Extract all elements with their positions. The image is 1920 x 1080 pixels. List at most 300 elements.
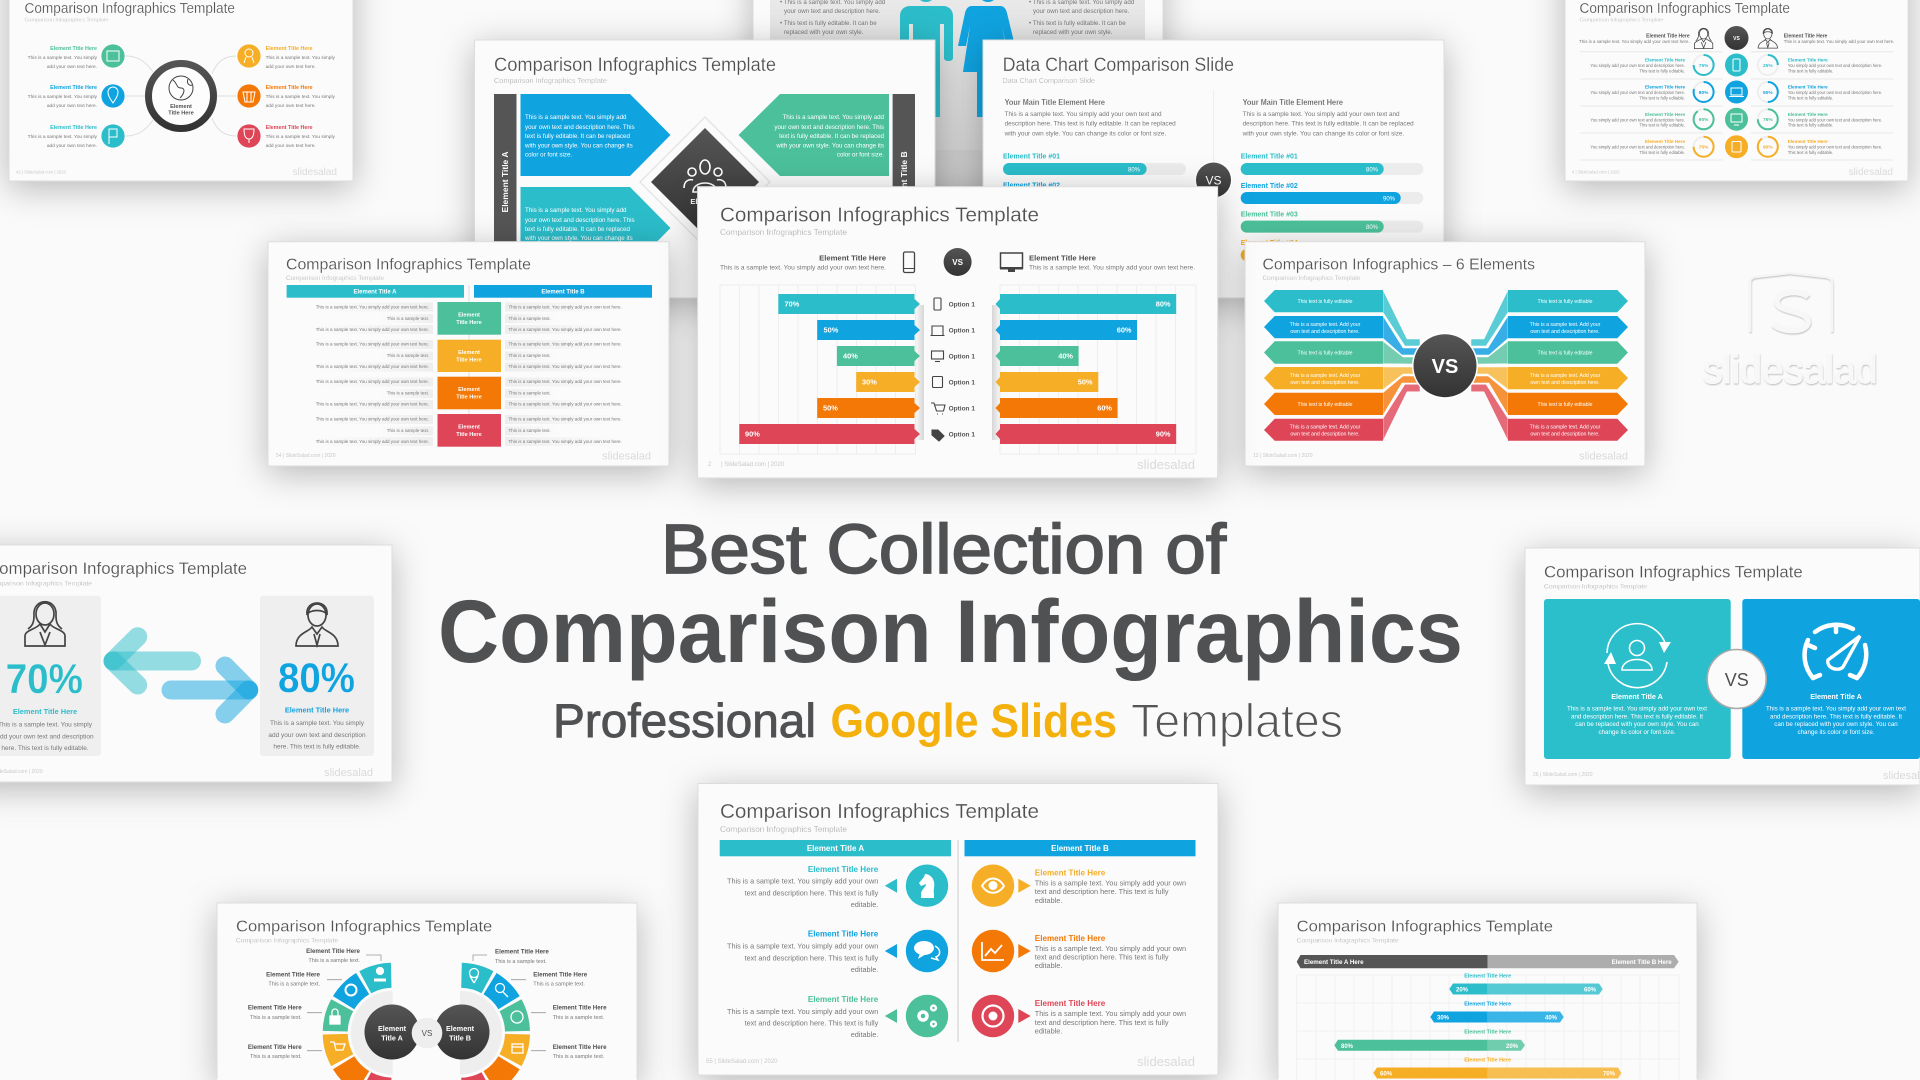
bullet text left: • This text is fully editable. It can be <box>780 20 877 27</box>
header row: This is a sample text. You simply add your own text here. <box>1784 39 1894 44</box>
element A hub <box>364 1004 420 1060</box>
element B hub: Element <box>446 1024 475 1033</box>
left labels: This is a sample text. You simply <box>28 94 98 100</box>
gauge percentages: 75% <box>1763 117 1773 123</box>
left labels: This is a sample text. <box>250 1054 302 1060</box>
right labels: add your own text here. <box>266 143 316 149</box>
header bar left <box>1297 955 1488 968</box>
right banners: This text is fully editable <box>1537 299 1593 305</box>
left row labels: Element Title Here <box>1645 112 1685 117</box>
left banners <box>1264 290 1383 441</box>
right labels: This is a sample text. You simply <box>266 134 336 140</box>
green pentagon: color or font size. <box>837 152 884 158</box>
VS badge: VS <box>1205 174 1222 188</box>
left row labels: This text is fully editable. <box>1639 123 1685 128</box>
left column text: Your Main Title Element Here <box>1005 98 1106 107</box>
header row <box>1579 26 1894 50</box>
right row labels <box>1788 58 1882 155</box>
watermark: slidesalad logo <box>1703 273 1878 392</box>
subheading: Comparison Infographics Template <box>720 825 848 834</box>
gauge percentages <box>1699 63 1773 150</box>
gauge percentages: 75% <box>1699 144 1709 150</box>
right banners: own text and description here. <box>1530 432 1600 438</box>
right banners: This text is fully editable <box>1537 402 1593 408</box>
right text rows: This is a sample text. You simply add your own text here. <box>508 327 622 332</box>
heading: Comparison Infographics Template <box>286 256 531 274</box>
right header text: Element Title Here <box>1029 254 1097 262</box>
row 3: Element Title Here <box>1464 1030 1511 1036</box>
center option icons <box>930 298 945 441</box>
heading: Comparison Infographics Template <box>236 919 492 936</box>
center element blocks: Title Here <box>456 394 482 400</box>
center option labels: Option 1 <box>949 406 975 412</box>
blue pentagon: This is a sample text. You simply add <box>525 114 627 121</box>
right row labels: Element Title Here <box>1788 84 1828 90</box>
right item 1 <box>972 864 1186 907</box>
right text rows: This is a sample text. <box>508 428 551 433</box>
right item 2: Element Title Here <box>1035 934 1106 943</box>
diamond with team icon: Element <box>690 197 720 206</box>
subheading: Data Chart Comparison Slide <box>1003 78 1095 85</box>
subheading: Comparison Infographics Template <box>720 228 848 237</box>
panel: blue element A: Element Title A <box>1810 692 1862 701</box>
heading: Comparison Infographics – 6 Elements <box>1262 256 1535 274</box>
left item 2: text and description here. This text is fully <box>745 954 879 962</box>
left item 1: editable. <box>851 900 878 909</box>
right row labels: You simply add your own text and description here. <box>1788 63 1882 68</box>
left text rows: This is a sample text. You simply add your own text here. <box>316 304 429 310</box>
center element blocks: Title Here <box>456 432 482 438</box>
subheading: Comparison Infographics Template <box>24 18 108 24</box>
left item 3: Element Title Here <box>808 995 879 1004</box>
brand: slidesalad <box>1137 457 1195 472</box>
column header A: Element Title A <box>807 844 864 853</box>
right item 3 <box>972 995 1186 1037</box>
left banners: own text and description here. <box>1290 432 1360 438</box>
heading: Comparison Infographics Template <box>24 0 235 17</box>
right labels: Element Title Here <box>266 46 313 52</box>
right text rows: This is a sample text. You simply add your own text here. <box>508 439 622 444</box>
column header B <box>964 840 1196 856</box>
left row labels: You simply add your own text and description here. <box>1590 90 1685 95</box>
left bars: 70% <box>784 300 800 308</box>
left text rows: This is a sample text. You simply add your own text here. <box>316 439 429 444</box>
left labels: Element Title Here <box>50 46 97 52</box>
left bar: Element Title A <box>500 152 510 212</box>
teal pentagon <box>520 187 670 269</box>
header row: VS <box>1733 36 1740 42</box>
subheading: professional google slides templates <box>553 694 1343 747</box>
row 1 <box>1449 973 1603 994</box>
element A hub: Element <box>378 1024 407 1033</box>
left item 1: Element Title Here <box>808 865 879 874</box>
left column text: description here. This text is fully editable. It can be replaced <box>1005 120 1176 128</box>
right item 2: editable. <box>1035 961 1062 970</box>
VS badge: VS <box>1725 670 1749 690</box>
heading: Comparison Infographics Template <box>720 205 1039 227</box>
right item 3: text and description here. This text is fully <box>1035 1018 1169 1027</box>
right labels: This is a sample text. <box>533 982 585 988</box>
right bars: 50% <box>1078 378 1093 386</box>
left header text <box>720 254 887 271</box>
left labels <box>248 948 361 1060</box>
right text rows: This is a sample text. <box>508 390 551 396</box>
left banners: This is a sample text. Add your <box>1290 322 1361 328</box>
right labels <box>266 46 336 149</box>
VS badge: VS <box>422 1029 432 1038</box>
brand: slidesalad <box>1137 1054 1195 1069</box>
panel: 70 percent: Element Title Here <box>13 707 77 716</box>
left banners: This is a sample text. Add your <box>1290 373 1361 379</box>
bullet text left: your own text and description here. <box>784 8 881 15</box>
slide: bottom right diverging bars <box>1278 903 1697 1080</box>
element B hub <box>434 1004 490 1060</box>
right row labels: Element Title Here <box>1788 112 1828 117</box>
teal pentagon: This is a sample text. You simply add <box>525 207 627 214</box>
right bar: Element Title B <box>899 151 909 213</box>
right row labels: You simply add your own text and description here. <box>1788 117 1882 122</box>
right header text <box>1029 254 1195 271</box>
right text rows: This is a sample text. You simply add your own text here. <box>508 402 622 406</box>
element B hub: Title B <box>449 1034 471 1042</box>
row 2: 30% <box>1437 1016 1450 1022</box>
right banners: This text is fully editable <box>1537 350 1593 356</box>
center option labels: Option 1 <box>949 432 975 438</box>
right banners: This is a sample text. Add your <box>1530 322 1601 328</box>
heading: Data Chart Comparison Slide <box>1003 55 1234 76</box>
column header A: Element Title A <box>353 290 397 296</box>
row 3: 80% <box>1341 1044 1354 1050</box>
right item 2: This is a sample text. You simply add your own <box>1035 944 1186 953</box>
row stripes <box>315 302 623 446</box>
left bar <box>494 94 516 298</box>
left bars: 90% <box>745 430 760 438</box>
center element blocks <box>438 302 501 447</box>
right bars: 60% <box>1097 404 1112 412</box>
slide: right two panels VS <box>1525 548 1920 785</box>
left text rows: This is a sample text. <box>387 316 429 321</box>
left column text <box>1004 98 1176 138</box>
left item 1: This is a sample text. You simply add your own <box>727 876 878 886</box>
right column text <box>1242 98 1414 138</box>
left text rows: This is a sample text. You simply add your own text here. <box>316 342 429 346</box>
left bar chart: 80% <box>1128 168 1141 174</box>
center option labels <box>949 302 975 438</box>
blue pentagon: with your own style. You can change its <box>524 142 633 150</box>
right bars: 80% <box>1156 300 1171 308</box>
right labels: This is a sample text. You simply <box>266 94 336 100</box>
panel: 80 percent: add your own text and description <box>268 732 366 739</box>
segment icons <box>330 968 523 1053</box>
left labels: Element Title Here <box>248 1005 302 1012</box>
row 3: 20% <box>1506 1044 1519 1050</box>
right bar chart <box>1241 154 1423 261</box>
panel: 80 percent: This is a sample text. You simply <box>270 720 365 727</box>
right bars: 60% <box>1117 326 1132 334</box>
brand: slidesalad <box>1849 167 1893 178</box>
panel: teal element A: change its color or font size. <box>1598 729 1676 736</box>
right connectors <box>1471 290 1508 441</box>
footer: 42 | SlideSalad.com | 2020 <box>16 170 67 174</box>
left item 2: This is a sample text. You simply add your own <box>727 942 878 950</box>
right labels: This is a sample text. <box>553 1015 605 1021</box>
center element blocks: Element <box>458 424 480 430</box>
panel: 80 percent: here. This text is fully editable. <box>273 744 361 750</box>
left labels: add your own text here. <box>47 64 97 70</box>
slide: left arrows percentage <box>0 545 392 782</box>
left column text: This is a sample text. You simply add your own text and <box>1005 111 1162 118</box>
left banners: This text is fully editable <box>1297 402 1353 408</box>
center element blocks: Title Here <box>456 358 482 364</box>
column header B <box>474 285 652 298</box>
left labels: This is a sample text. <box>308 958 360 964</box>
row 4: 60% <box>1380 1072 1393 1078</box>
VS badge <box>412 1018 442 1048</box>
gauge percentages: 50% <box>1763 90 1773 96</box>
column header B: Element Title B <box>1051 844 1109 853</box>
left text rows: This is a sample text. You simply add your own text here. <box>316 379 429 384</box>
right item 2 <box>972 930 1186 972</box>
watermark: slidesalad logo: slidesalad <box>1703 348 1878 392</box>
gauge percentages: 90% <box>1763 144 1773 150</box>
left bar chart <box>1003 154 1186 190</box>
right labels: This is a sample text. <box>553 1054 605 1060</box>
label connectors <box>307 955 546 1051</box>
left labels: Element Title Here <box>266 972 321 979</box>
center element blocks: Element <box>458 312 480 318</box>
footer: 4 | SlideSalad.com | 2020 <box>1572 170 1620 174</box>
brand: slidesalad <box>1579 450 1628 462</box>
left text rows: This is a sample text. You simply add your own text here. <box>316 364 429 369</box>
right text rows: This is a sample text. <box>508 316 551 321</box>
row 3 <box>1334 1030 1525 1051</box>
slide: top middle people comparison <box>753 0 1163 187</box>
heading: Comparison Infographics Template <box>1544 564 1803 582</box>
right segmented ring <box>461 963 530 1080</box>
brand: slidesalad <box>602 450 651 462</box>
VS badge <box>1412 333 1478 399</box>
left banners: own text and description here. <box>1290 380 1360 386</box>
left text rows <box>316 304 429 444</box>
left banners: This text is fully editable <box>1297 299 1353 305</box>
footer: 26 | SlideSalad.com | 2020 <box>1533 772 1593 778</box>
right column text: This is a sample text. You simply add your own text and <box>1243 111 1400 118</box>
right column text: Your Main Title Element Here <box>1243 98 1344 107</box>
right row labels: You simply add your own text and description here. <box>1788 90 1882 95</box>
row 4: Element Title Here <box>1464 1058 1511 1064</box>
left row labels: Element Title Here <box>1645 58 1685 62</box>
panel: 80 percent: Element Title Here <box>285 706 349 714</box>
right bar chart: Element Title #02 <box>1241 183 1298 190</box>
right labels: add your own text here. <box>266 64 316 70</box>
icon: male figure <box>900 0 953 117</box>
left bars: 30% <box>862 378 877 386</box>
right text rows: This is a sample text. You simply add your own text here. <box>508 304 622 310</box>
left item 1: text and description here. This text is fully <box>745 888 879 898</box>
hub ring with globe <box>148 64 214 128</box>
right labels: Element Title Here <box>495 949 549 956</box>
hub ring with globe: Title Here <box>168 110 194 116</box>
column header B: Element Title B <box>541 290 585 296</box>
left header text: Element Title Here <box>819 254 887 262</box>
left text rows: This is a sample text. <box>387 390 429 396</box>
right banners: own text and description here. <box>1530 329 1600 335</box>
right labels: Element Title Here <box>266 125 313 131</box>
green pentagon: This is a sample text. You simply add <box>783 114 885 121</box>
panel: teal element A: can be replaced with your own style. You can <box>1575 721 1699 728</box>
gauge percentages: 25% <box>1763 63 1773 69</box>
column header A <box>287 285 464 298</box>
left row labels: Element Title Here <box>1645 139 1685 144</box>
left item 2 <box>727 930 948 974</box>
subheading: professional google slides templates: Templates <box>1131 694 1343 747</box>
left banners: This is a sample text. Add your <box>1290 424 1361 430</box>
row 1: 60% <box>1584 988 1597 994</box>
left text rows: This is a sample text. You simply add your own text here. <box>316 402 429 406</box>
slide: central horizontal bar comparison: | SlideSalad.com | 2020 <box>721 462 785 468</box>
left banners: This text is fully editable <box>1297 350 1353 356</box>
heading: best collection of: Best Collection of <box>661 510 1227 588</box>
left labels: This is a sample text. <box>268 982 320 988</box>
header row: This is a sample text. You simply add your own text here. <box>1579 39 1690 44</box>
icon: female figure <box>958 0 1015 117</box>
center icon circles <box>1725 54 1748 158</box>
left item 2: editable. <box>851 965 878 974</box>
center option labels: Option 1 <box>949 380 975 386</box>
slide: top left central hub <box>9 0 353 181</box>
right labels: Element Title Here <box>553 1044 607 1051</box>
right labels <box>495 949 607 1060</box>
panel: blue element A: and description here. This text is fully editable. It <box>1770 713 1902 720</box>
green pentagon <box>738 94 889 176</box>
center element blocks: Element <box>458 387 480 393</box>
center option labels: Option 1 <box>949 328 975 334</box>
header bar right <box>1488 955 1679 968</box>
right row labels: This text is fully editable. <box>1788 150 1833 155</box>
icon: phone <box>904 252 914 272</box>
left row labels: This text is fully editable. <box>1639 68 1685 73</box>
left item 3 <box>727 995 948 1039</box>
panel: blue element A: This is a sample text. You simply add your own text <box>1766 706 1906 712</box>
right text rows: This is a sample text. You simply add your own text here. <box>508 379 622 384</box>
subheading: Comparison Infographics Template <box>1262 276 1361 282</box>
left icons <box>101 44 125 148</box>
right item 3: Element Title Here <box>1035 999 1106 1008</box>
row 2 <box>1430 1001 1564 1022</box>
left connectors <box>1383 290 1420 441</box>
right row labels: This text is fully editable. <box>1788 123 1833 128</box>
center option labels: Option 1 <box>949 354 975 360</box>
right labels: Element Title Here <box>533 972 588 979</box>
right bar chart: 80% <box>1366 168 1379 174</box>
connectors <box>126 56 236 136</box>
panel: blue element A: can be replaced with your own style. You can <box>1774 721 1898 728</box>
slide: table comparison <box>268 242 669 466</box>
right bars <box>996 294 1176 444</box>
left labels: This is a sample text. <box>250 1015 302 1021</box>
left header text: This is a sample text. You simply add your own text here. <box>720 264 886 271</box>
VS badge: VS <box>952 258 964 267</box>
heading: Comparison Infographics Template <box>494 55 776 76</box>
right row labels: This text is fully editable. <box>1788 95 1833 100</box>
left labels <box>28 46 98 149</box>
bullet text left: replaced with your own style. <box>784 29 864 36</box>
hub ring with globe: Element <box>170 104 192 110</box>
right text rows: This is a sample text. You simply add your own text here. <box>508 364 622 369</box>
row 4 <box>1373 1058 1621 1078</box>
slide: blue and green arrows around diamond <box>474 40 935 298</box>
arrow: left pointing teal <box>113 637 192 685</box>
element A hub: Title A <box>381 1034 403 1042</box>
blue pentagon <box>520 94 670 176</box>
right text rows: This is a sample text. You simply add your own text here. <box>508 416 622 422</box>
left segmented ring <box>323 963 392 1080</box>
left bars: 50% <box>824 326 839 334</box>
row 4: 70% <box>1603 1072 1616 1078</box>
slide: central horizontal bar comparison <box>698 187 1218 478</box>
left row labels: You simply add your own text and description here. <box>1590 117 1685 122</box>
panel: 80 percent <box>260 596 374 756</box>
left banners: own text and description here. <box>1290 329 1360 335</box>
slide: bottom center icon list <box>698 784 1218 1075</box>
header row: Element Title Here <box>1646 34 1690 40</box>
right bar chart: 80% <box>1366 225 1379 231</box>
panel: blue element A <box>1742 599 1920 759</box>
header bar right: Element Title B Here <box>1612 959 1672 966</box>
blue pentagon: color or font size. <box>525 152 572 158</box>
left item 3: This is a sample text. You simply add your own <box>727 1007 878 1016</box>
right item 3: This is a sample text. You simply add your own <box>1035 1009 1186 1018</box>
right labels: This is a sample text. You simply <box>266 55 336 61</box>
right banners <box>1508 290 1628 441</box>
green pentagon: your own text and description here. This <box>774 124 884 131</box>
left row labels: You simply add your own text and description here. <box>1590 145 1685 150</box>
center element blocks: Title Here <box>456 320 482 326</box>
VS badge <box>944 248 972 276</box>
footer: 55 | SlideSalad.com | 2020 <box>706 1059 778 1065</box>
panel: teal element A: This is a sample text. You simply add your own text <box>1567 706 1707 712</box>
panel: 70 percent: here. This text is fully editable. <box>1 745 89 752</box>
right banners: This is a sample text. Add your <box>1530 373 1601 379</box>
right labels: Element Title Here <box>553 1005 607 1012</box>
right bar chart: Element Title #01 <box>1241 154 1298 160</box>
left row labels <box>1590 58 1685 155</box>
left donut gauges <box>1694 55 1714 157</box>
brand: slidesalad <box>324 767 373 779</box>
left column text: with your own style. You can change its color or font size. <box>1004 130 1166 138</box>
panel: blue element A: change its color or font size. <box>1797 729 1875 736</box>
center option labels: Option 1 <box>949 302 975 308</box>
right labels: add your own text here. <box>266 103 316 109</box>
row 1: Element Title Here <box>1464 973 1511 979</box>
right item 1: text and description here. This text is fully <box>1035 887 1169 896</box>
footer: 2 <box>708 462 712 468</box>
subheading: Comparison Infographics Template <box>286 276 385 282</box>
panel: 70 percent: This is a sample text. You simply <box>0 722 93 728</box>
left text rows: This is a sample text. You simply add your own text here. <box>316 416 429 422</box>
right row labels: Element Title Here <box>1788 58 1828 62</box>
right labels: This is a sample text. <box>495 959 547 965</box>
teal pentagon: with your own style. You can change its <box>524 235 633 242</box>
subheading: professional google slides templates: Google Slides <box>830 694 1117 747</box>
gray base band <box>935 150 983 187</box>
left bars: 40% <box>843 352 858 360</box>
right text rows: This is a sample text. You simply add your own text here. <box>508 342 622 346</box>
left bar chart: Element Title #01 <box>1003 154 1060 160</box>
right row labels: Element Title Here <box>1788 139 1828 144</box>
footer: 54 | SlideSalad.com | 2020 <box>276 453 336 459</box>
diamond with team icon <box>640 117 770 247</box>
